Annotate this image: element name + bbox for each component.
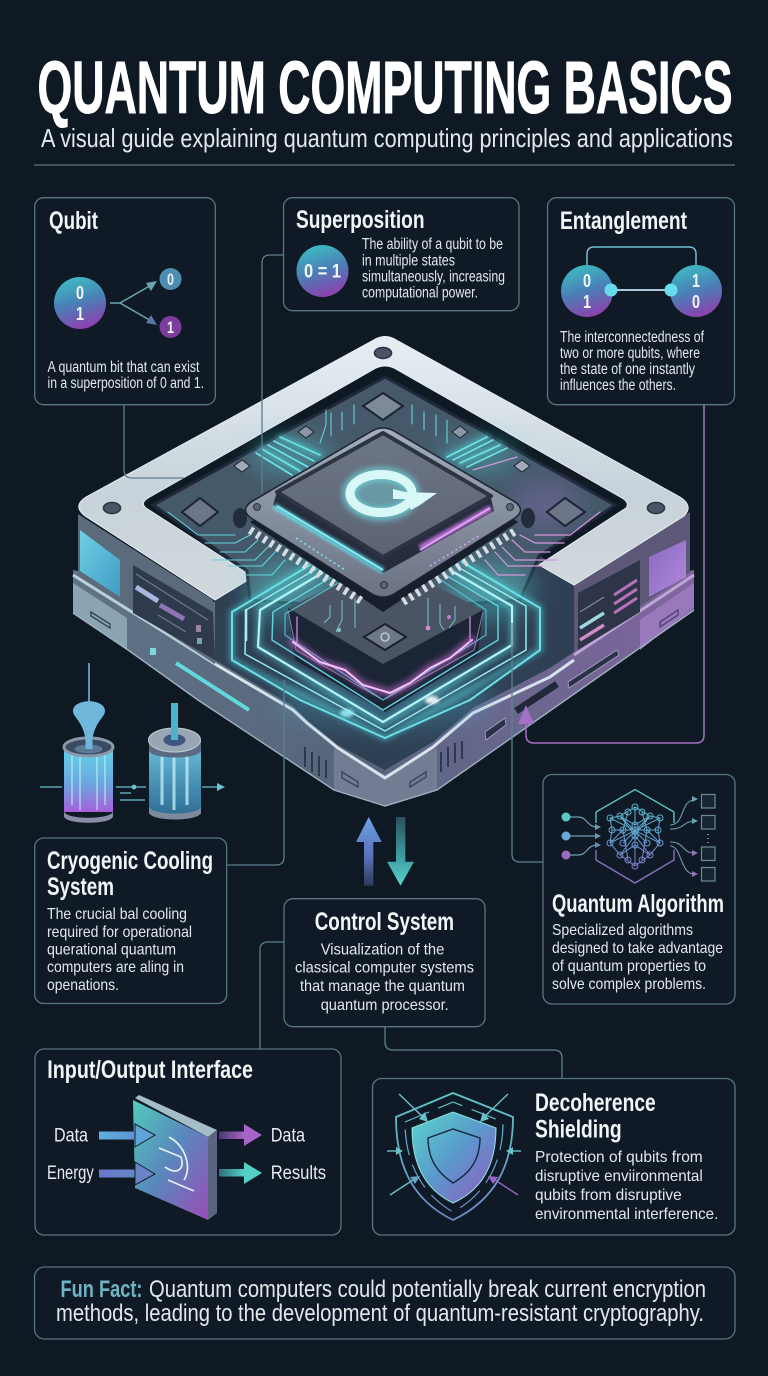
text: entanglement description <box>560 329 705 394</box>
text: superposition description: The ability of a qubit to be <box>362 236 503 253</box>
text: qubit description <box>48 359 204 392</box>
text: superposition description: in multiple states <box>362 252 455 270</box>
text: shielding description <box>535 1149 718 1223</box>
icon: qubit splitting into 0 and 1 <box>54 268 182 338</box>
upper traces <box>256 437 507 475</box>
panel: entanglement <box>548 198 734 405</box>
screws <box>104 348 664 514</box>
icon: superposition orb <box>296 245 348 297</box>
icon: qubit splitting into 0 and 1: 0 <box>167 270 174 289</box>
panel: fun fact <box>34 1267 735 1339</box>
icon: qubit splitting into 0 and 1: 1 <box>76 304 84 324</box>
icon: interface block with arrows: Data <box>271 1126 305 1147</box>
text: control description: Visualization of the <box>321 941 444 958</box>
purple entanglement connector arrow <box>518 405 704 743</box>
text: shielding description: qubits from disruptive <box>535 1187 682 1204</box>
glowing circuit traces <box>168 405 600 738</box>
base block <box>73 570 694 806</box>
text: entanglement description: two or more qubits, where <box>560 345 700 362</box>
icon: superposition orb: 0 = 1 <box>304 262 341 282</box>
heading: cryogenic cooling system: Cryogenic Cooling <box>47 847 213 875</box>
central chip with Q logo <box>233 428 535 612</box>
icon: qubit splitting into 0 and 1: 0 <box>76 283 84 303</box>
recessed cavity <box>153 377 615 610</box>
heading: superposition: Superposition <box>296 206 424 234</box>
text: algorithm description <box>552 922 723 993</box>
heading: input output interface: Input/Output Interface <box>47 1056 253 1084</box>
heading: decoherence shielding: Shielding <box>535 1116 622 1144</box>
text: algorithm description: of quantum properties to <box>552 958 706 975</box>
text: cooling description: The crucial bal cooling <box>47 906 187 923</box>
text: cooling description: querational quantum <box>47 942 176 958</box>
lower sub-chip block <box>288 560 483 712</box>
text: superposition description: simultaneously, increasing <box>362 268 505 286</box>
heading: decoherence shielding <box>535 1089 656 1144</box>
text: cooling description: openations. <box>47 977 119 994</box>
panel: decoherence shielding <box>372 1078 735 1235</box>
icon: entangled qubits: 1 <box>583 292 591 312</box>
connector lines <box>124 255 562 1078</box>
icon: algorithm hexagon network <box>562 790 715 883</box>
recessed floor <box>215 420 574 770</box>
text: superposition description: computational power. <box>362 284 478 302</box>
text: algorithm description: designed to take advantage <box>552 940 723 957</box>
text: cooling description: computers are aling in <box>47 959 184 976</box>
top plate <box>79 336 688 600</box>
heading: decoherence shielding: Decoherence <box>535 1089 656 1117</box>
small circuit chips <box>182 393 585 526</box>
panel: cryogenic cooling system <box>35 838 227 1004</box>
panel: qubit <box>35 198 215 405</box>
panel: input output interface <box>35 1049 341 1235</box>
icon: interface block with arrows: Data <box>54 1126 88 1147</box>
icon: entangled qubits <box>561 247 722 317</box>
text: control description <box>295 941 474 1014</box>
icon: shield with incoming arrows <box>387 1093 521 1220</box>
text: entanglement description: The interconnectedness of <box>560 329 705 346</box>
text: shielding description: environmental interference. <box>535 1206 718 1223</box>
heading: cryogenic cooling system <box>47 847 213 901</box>
text: qubit description: A quantum bit that can exist <box>48 359 200 376</box>
arrows: control signal up and down <box>356 817 414 886</box>
panel: quantum algorithm <box>543 774 735 1004</box>
text: control description: classical computer systems <box>295 960 474 977</box>
text: control description: that manage the quantum <box>300 978 465 995</box>
icon: qubit splitting into 0 and 1: 1 <box>167 318 174 337</box>
icon: interface block with arrows <box>47 1095 326 1220</box>
heading: control system: Control System <box>315 908 454 936</box>
text: control description: quantum processor. <box>321 997 449 1014</box>
right wall with glass and rack <box>574 512 690 652</box>
text: shielding description: disruptive enviironmental <box>535 1168 703 1185</box>
text: algorithm description: solve complex problems. <box>552 976 706 993</box>
icon: interface block with arrows: Energy <box>47 1163 94 1184</box>
heading: qubit: Qubit <box>49 207 99 235</box>
text: cooling description: required for operational <box>47 924 192 941</box>
icon: interface block with arrows: Results <box>271 1163 326 1184</box>
text: algorithm description: Specialized algorithms <box>552 922 693 939</box>
icon: entangled qubits: 1 <box>692 271 700 291</box>
right cylinder <box>148 703 201 820</box>
left cylinder <box>64 735 113 823</box>
text: qubit description: in a superposition of 0 and 1. <box>48 375 204 392</box>
icon: entangled qubits: 0 <box>583 271 591 291</box>
left wall with glass and rack <box>78 514 215 664</box>
text: entanglement description: the state of one instantly <box>560 361 695 378</box>
text: superposition description <box>362 236 505 302</box>
panel: control system <box>284 899 485 1027</box>
base rim <box>215 660 574 778</box>
icon: entangled qubits: 0 <box>692 292 700 312</box>
label: fun fact: Fun Fact: <box>60 1276 142 1303</box>
text: entanglement description: influences the others. <box>560 377 676 394</box>
panel: superposition <box>284 198 519 311</box>
isometric quantum processor illustration <box>73 336 694 806</box>
text: shielding description: Protection of qubits from <box>535 1149 703 1166</box>
text: cooling description <box>47 906 192 994</box>
icon: cryogenic cylinders <box>40 663 225 823</box>
heading: cryogenic cooling system: System <box>47 873 114 901</box>
glow spots <box>340 696 439 717</box>
heading: entanglement: Entanglement <box>560 207 688 235</box>
teal and purple haze <box>245 437 580 730</box>
